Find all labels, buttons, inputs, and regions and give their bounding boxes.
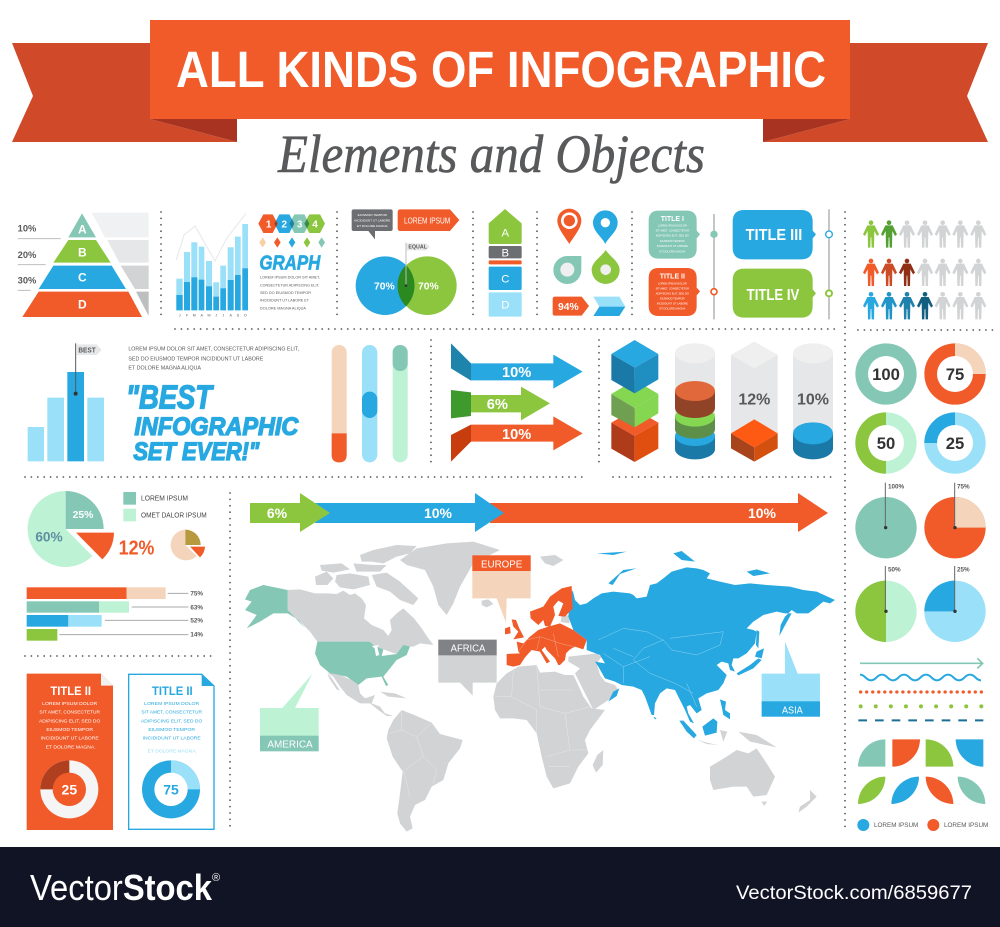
title card I: TITLE I [661, 216, 684, 223]
callout: america: AMERICA [267, 740, 313, 751]
footer logo: VectorStock [30, 867, 213, 908]
venn diagram [356, 243, 457, 315]
vertical sliders [332, 345, 408, 462]
pie 25%: 25% [957, 567, 970, 574]
numbered hexagons: 3 [297, 219, 303, 230]
title card I: EIUSMOD TEMPOR [660, 239, 685, 243]
heading: graph: GRAPH [259, 251, 321, 274]
speech bubble: EIUSMOD TEMPOR [358, 213, 388, 217]
blue document: INCIDIDUNT UT LABORE [143, 736, 201, 742]
pie chart: 25% [73, 510, 93, 521]
pie 75%: 75% [957, 483, 970, 490]
pie chart: 60% [35, 529, 63, 544]
title card III [733, 210, 816, 259]
numbered hexagons: 4 [312, 219, 318, 230]
stacked bar chart: J [222, 314, 224, 318]
arrow line [860, 658, 983, 668]
arrow: 10% blue [451, 343, 583, 389]
venn diagram: 70% [418, 282, 439, 293]
text block: graph [260, 276, 320, 311]
panel: dividers and shapes [857, 658, 988, 831]
title card II: LOREM IPSUM DOLOR [658, 281, 687, 285]
banner left tail [12, 43, 237, 142]
orange document: LOREM IPSUM DOLOR [42, 701, 98, 707]
progress arrows [250, 493, 828, 532]
callout: africa: AFRICA [451, 644, 486, 655]
legend [123, 492, 207, 521]
oceania and islands [540, 555, 817, 813]
stacked bar chart: A [200, 314, 203, 318]
arrow: 10% orange [451, 416, 583, 462]
title card I [649, 211, 700, 259]
donut 50 [855, 412, 917, 474]
title card I: INCIDIDUNT UT LABORE [657, 244, 688, 248]
text block: graph: INCIDIDUNT UT LABORE ET [260, 299, 310, 303]
tag: lorem ipsum: LOREM IPSUM [404, 216, 450, 225]
progress arrows: 10% [748, 505, 777, 521]
prism 12% [731, 342, 778, 462]
panel: left lower column [27, 491, 214, 830]
orange document: TITLE II [50, 684, 91, 698]
subtitle: Elements and Objects [277, 124, 705, 184]
pyramid: C [78, 270, 87, 284]
dotted line green [861, 700, 982, 712]
tag: 94%: 94% [558, 302, 579, 313]
title card II: TITLE II [660, 274, 685, 281]
blue document: EIUSMOD TEMPOR [148, 727, 195, 733]
great lakes [372, 645, 379, 656]
registered mark: ® [212, 872, 220, 884]
donut 75 [924, 343, 986, 405]
text block: lorem [128, 347, 299, 372]
arrow: 6% green: 6% [487, 397, 508, 413]
legend: LOREM IPSUM [874, 822, 918, 829]
text block: graph: SED DO EIUSMOD TEMPOR [260, 291, 311, 295]
venn diagram: EQUAL [408, 245, 428, 251]
blue document: 75 [163, 782, 179, 798]
pie 50%: 50% [888, 567, 901, 574]
venn diagram: 70% [374, 282, 395, 293]
stacked bar chart: J [215, 314, 217, 318]
stacked bar chart: M [193, 314, 196, 318]
legend: LOREM IPSUM [944, 822, 988, 829]
title card II: INCIDIDUNT UT LABORE [657, 302, 688, 306]
blue document [129, 674, 214, 829]
donut 100 [855, 343, 917, 405]
pyramid: D [78, 297, 87, 311]
legend [857, 819, 988, 831]
world map: west [245, 542, 500, 832]
callout: africa [438, 640, 497, 696]
quote heading [126, 379, 299, 466]
wave line [860, 675, 981, 680]
icon: blue pin [593, 210, 618, 244]
horizontal bars: 75% [190, 590, 203, 597]
title card II: SIT AMET, CONSECTETUR [656, 286, 689, 290]
stacked bar chart: F [186, 314, 189, 318]
horizontal bars: 63% [190, 604, 203, 611]
blue document: SIT AMET, CONSECTETUR [141, 710, 202, 716]
cylinder 10% [793, 343, 833, 459]
text block: lorem: ET DOLORE MAGNA ALIQUA [128, 366, 201, 372]
stacked labels: D [501, 299, 509, 311]
asia [568, 551, 835, 738]
pie chart [28, 491, 154, 567]
icon: chevron [593, 297, 625, 316]
people icons [863, 220, 986, 319]
title card IV [733, 269, 816, 318]
pie 25% [924, 566, 986, 642]
tag: lorem ipsum [398, 209, 459, 231]
stacked bar chart: J [179, 314, 181, 318]
quote heading: "BEST [126, 379, 214, 416]
horizontal bars: 52% [190, 618, 203, 625]
pie 100%: 100% [888, 483, 905, 490]
callout: europe [472, 555, 531, 623]
donut 50: 50 [877, 434, 895, 453]
orange document: SIT AMET, CONSECTETUR [39, 710, 100, 716]
title banner [12, 20, 988, 142]
stacked labels: A [502, 228, 510, 240]
cylinder 10%: 10% [797, 391, 829, 408]
progress arrows: 6% [267, 505, 288, 521]
text block: graph: DOLORE MAGNA ALIQUA [260, 307, 307, 311]
title card II: EIUSMOD TEMPOR [660, 297, 685, 301]
donut 25: 25 [946, 434, 964, 453]
title card III: TITLE III [746, 227, 802, 244]
title card I: ADIPISCING ELIT, SED DO [656, 234, 689, 238]
stacked bar chart: O [244, 314, 247, 318]
pyramid: 20% [18, 250, 37, 260]
panel: top middle elements [332, 209, 833, 462]
icon: orange pin [557, 209, 581, 244]
stacked labels [489, 209, 522, 317]
stacked labels: C [501, 273, 509, 285]
arrow: 10% blue: 10% [502, 365, 531, 381]
isometric cubes [611, 340, 658, 462]
leaf shapes [858, 777, 985, 804]
timeline rail [710, 214, 718, 319]
panel: right column [855, 220, 986, 642]
pie chart: 12% [119, 537, 154, 560]
pie 100% [855, 483, 917, 558]
text block: graph: CONSECTETUR ADIPISCING ELIT, [260, 283, 319, 287]
callout: america [260, 674, 319, 751]
pie 50% [855, 566, 917, 642]
baltic states [561, 615, 570, 623]
panel: pyramid, graph, best chart [18, 213, 325, 466]
text block: lorem: LOREM IPSUM DOLOR SIT AMET, CONSECTETUR ADIPISCING ELIT, [128, 347, 299, 353]
pyramid [18, 213, 149, 317]
icon: green drop [592, 250, 620, 284]
alaska [245, 585, 305, 628]
canada and arctic [288, 542, 500, 654]
blue document: ET DOLORE MAGNA. [148, 749, 197, 755]
tag: 94% [553, 297, 589, 316]
central america [327, 673, 393, 716]
speech bubble: ET DOLORE MAGNA [357, 224, 388, 228]
donut 25 [924, 412, 986, 474]
stacked bar chart [176, 213, 248, 318]
pyramid: 30% [18, 275, 37, 285]
orange document [27, 674, 113, 830]
united states [315, 642, 410, 686]
arrow: 10% orange: 10% [502, 427, 531, 443]
footer url: VectorStock.com/6859677 [736, 883, 972, 904]
blue document: LOREM IPSUM DOLOR [144, 701, 200, 707]
madagascar [593, 750, 603, 773]
pyramid: 10% [18, 224, 37, 234]
europe [505, 586, 587, 667]
orange document: EIUSMOD TEMPOR [46, 727, 93, 733]
stacked bar chart: M [207, 314, 211, 318]
title card IV: TITLE IV [747, 287, 800, 304]
quote heading: SET EVER!" [133, 439, 260, 466]
timeline rail [826, 209, 832, 319]
title card I: LOREM IPSUM DOLOR [658, 224, 687, 228]
blue document: TITLE II [152, 684, 193, 698]
orange document: INCIDIDUNT UT LABORE [41, 736, 99, 742]
title card II: ET DOLORE MAGNA [659, 307, 685, 311]
prism 12%: 12% [738, 391, 770, 408]
banner right tail [763, 43, 988, 142]
quote heading: INFOGRAPHIC [134, 413, 299, 441]
quarter shapes [858, 739, 983, 767]
icon: teal drop [553, 256, 581, 284]
title card II: ADIPISCING ELIT, SED DO [656, 291, 689, 295]
title card II [649, 268, 700, 316]
title: ALL KINDS OF INFOGRAPHIC [176, 41, 826, 98]
speech bubble: INCIDIDUNT UT LABORE [354, 219, 390, 223]
dashed line [858, 717, 983, 723]
text block: lorem: SED DO EIUSMOD TEMPOR INCIDIDUNT UT LABORE [128, 356, 264, 362]
blue document: ADIPISCING ELIT, SED DO [141, 718, 202, 724]
horizontal bars [27, 587, 203, 641]
best bar chart: BEST [78, 346, 96, 355]
title card I: SIT AMET, CONSECTETUR [656, 229, 689, 233]
text block: graph: LOREM IPSUM DOLOR SIT AMET, [260, 276, 320, 280]
numbered hexagons [258, 214, 325, 248]
numbered hexagons: 2 [282, 219, 288, 230]
numbered hexagons: 1 [266, 219, 272, 230]
legend: LOREM IPSUM [141, 496, 188, 503]
pie 75% [924, 483, 986, 558]
callout: europe: EUROPE [481, 559, 523, 570]
orange document: ADIPISCING ELIT, SED DO [39, 718, 100, 724]
donut 75: 75 [946, 365, 964, 384]
africa [493, 665, 605, 788]
callout: asia: ASIA [782, 705, 803, 716]
horizontal bars: 14% [190, 632, 203, 639]
pyramid: B [78, 246, 87, 260]
legend: OMET DALOR IPSUM [141, 512, 207, 519]
callouts [260, 555, 531, 751]
stacked cylinder [675, 343, 715, 459]
speech bubble [352, 209, 393, 239]
stacked labels: B [502, 247, 509, 259]
arrow: 6% green [451, 387, 550, 420]
title card I: ET DOLORE MAGNA [659, 249, 685, 253]
stacked bar chart: A [229, 314, 232, 318]
small pie [171, 530, 205, 560]
south america [387, 710, 463, 832]
callout: asia [762, 642, 820, 717]
dotted line orange [861, 687, 982, 697]
best bar chart [28, 343, 104, 461]
progress arrows: 10% [424, 505, 453, 521]
orange document: 25 [62, 782, 77, 798]
stacked bar chart: S [237, 314, 240, 318]
donut 100: 100 [872, 365, 900, 384]
footer bar [0, 847, 1000, 927]
middle east [568, 653, 618, 710]
orange document: ET DOLORE MAGNA. [46, 744, 96, 750]
pyramid: A [78, 223, 87, 237]
world map: east [493, 551, 835, 813]
